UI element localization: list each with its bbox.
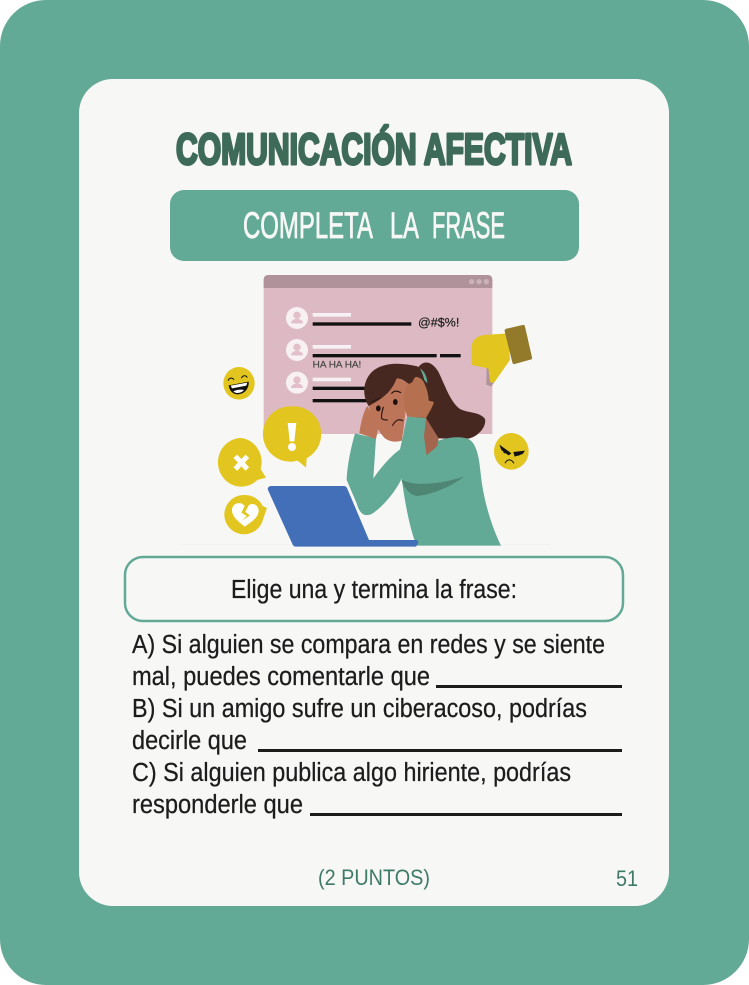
question A: mal, puedes comentarle que <box>132 663 430 691</box>
laptop <box>268 486 418 547</box>
question C <box>132 759 622 819</box>
instruction box <box>125 557 623 621</box>
woman <box>347 362 501 546</box>
left hand <box>359 406 379 439</box>
questions text <box>132 631 622 819</box>
hair back <box>403 362 485 439</box>
icon: broken heart bubble <box>224 495 267 534</box>
ground line <box>180 543 550 546</box>
comment 1: @#$%! <box>418 315 459 329</box>
icon: cross bubble <box>218 438 266 487</box>
illustration: cyberbullying <box>180 275 550 547</box>
subtitle banner <box>170 190 579 261</box>
browser window <box>264 275 492 434</box>
question B <box>132 695 622 755</box>
sweater shadow <box>401 477 464 496</box>
question A <box>132 631 622 691</box>
hair tie <box>420 368 427 383</box>
question B: decirle que <box>132 727 247 755</box>
question C: responderle que <box>132 791 303 819</box>
icon: laughing emoji <box>223 367 255 400</box>
subtitle banner: FRASE <box>432 205 505 246</box>
question A: A) Si alguien se compara en redes y se siente <box>132 631 605 659</box>
comment 2: HA HA HA! <box>313 360 361 370</box>
icon: exclamation bubble <box>263 406 321 468</box>
sweater <box>347 417 501 546</box>
comment 1 <box>286 307 459 329</box>
hair front <box>364 364 418 406</box>
subtitle banner: LA <box>390 205 419 246</box>
subtitle banner: COMPLETA <box>243 205 373 246</box>
title: COMUNICACIÓN AFECTIVA <box>176 124 572 174</box>
neck <box>424 418 439 455</box>
right hand <box>404 377 434 418</box>
points label: (2 PUNTOS) <box>318 865 430 890</box>
face <box>368 377 409 442</box>
instruction box: Elige una y termina la frase: <box>231 576 517 604</box>
white card <box>79 79 669 906</box>
face features <box>371 391 403 425</box>
question C: C) Si alguien publica algo hiriente, podrías <box>132 759 571 787</box>
icon: thumbs down <box>472 325 532 387</box>
comment 3 <box>286 372 369 402</box>
page number: 51 <box>616 866 638 891</box>
icon: angry emoji <box>494 433 529 470</box>
question B: B) Si un amigo sufre un ciberacoso, podrías <box>132 695 587 723</box>
comment 2 <box>286 339 461 370</box>
